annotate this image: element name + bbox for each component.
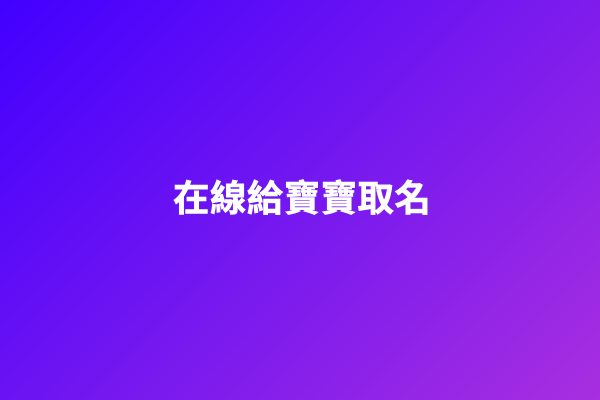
title: 在線給寶寶取名 bbox=[173, 178, 431, 219]
